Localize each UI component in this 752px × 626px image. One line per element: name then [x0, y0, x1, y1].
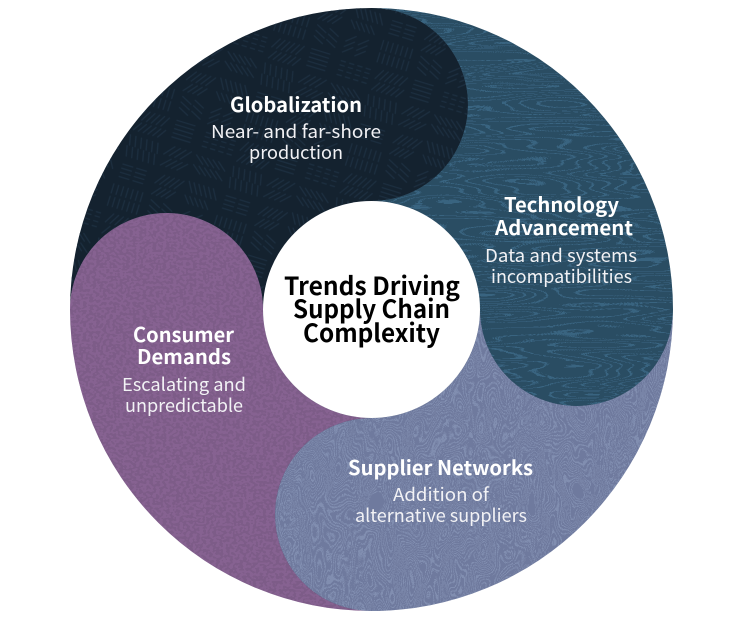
panel: Supplier Networks: Addition of: [393, 481, 490, 507]
panel: Technology Advancement: Technology: [504, 189, 620, 218]
panel: Globalization: [70, 8, 468, 304]
panel: Consumer Demands: unpredictable: [125, 392, 243, 418]
panel: Globalization: production: [249, 139, 343, 165]
panel: Technology Advancement: Advancement: [494, 212, 634, 241]
panel: Consumer Demands: Demands: [137, 341, 231, 370]
panel: Technology Advancement: incompatibilities: [491, 263, 632, 289]
panel: Technology Advancement: Data and systems: [485, 242, 637, 268]
center title: Supply Chain: [293, 290, 450, 326]
panel: Globalization: Near- and far-shore: [211, 118, 381, 144]
panel: Supplier Networks: alternative suppliers: [355, 502, 527, 528]
panel: Consumer Demands: Escalating and: [122, 371, 246, 397]
center title: Trends Driving: [284, 267, 460, 303]
panel: Globalization: Globalization: [230, 89, 362, 118]
panel: Supplier Networks: Supplier Networks: [348, 452, 533, 481]
backing disc: [71, 9, 672, 610]
panel: Consumer Demands: [70, 213, 369, 611]
panel: Consumer Demands: Consumer: [133, 319, 234, 348]
panel: Technology Advancement: [373, 8, 673, 406]
center title: [263, 201, 480, 418]
panel: Supplier Networks: [270, 300, 680, 620]
center title: Complexity: [303, 314, 441, 350]
